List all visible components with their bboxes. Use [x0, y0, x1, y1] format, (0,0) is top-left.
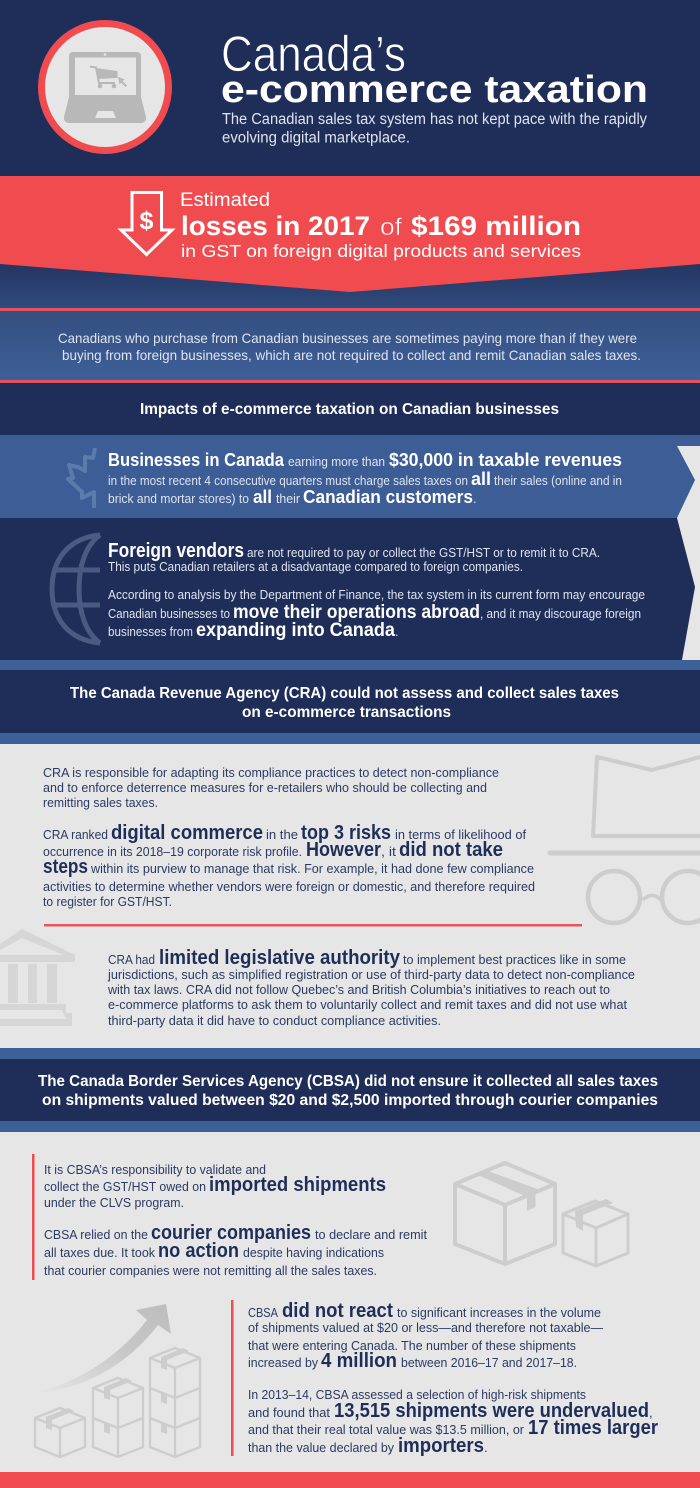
panel: CRA findings: [0, 744, 700, 1048]
CRA legislative authority text: third-party data it did have to conduct compliance activities.: [108, 1013, 441, 1028]
CBSA responsibility text: collect the GST/HST owed on: [44, 1179, 206, 1194]
losses headline: of: [380, 214, 402, 241]
CBSA undervalued shipments text: In 2013–14, CBSA assessed a selection of high-risk shipments: [248, 1387, 586, 1402]
foreign vendors text: move their operations abroad: [233, 601, 480, 623]
CRA digital commerce text: to register for GST/HST.: [43, 894, 172, 909]
CRA digital commerce text: occurrence in its 2018–19 corporate risk profile.: [43, 844, 302, 859]
panel: CBSA heading: [0, 1048, 700, 1132]
panel: consumer statement: buying from foreign businesses, which are not required to collect and remit Canadian sales taxes.: [62, 347, 641, 363]
foreign vendors text: [108, 540, 645, 641]
businesses text: $30,000 in taxable revenues: [389, 450, 622, 470]
foreign vendors text: expanding into Canada: [196, 619, 395, 641]
CBSA responsibility text: to declare and remit: [315, 1227, 427, 1242]
CBSA did not react text: of shipments valued at $20 or less—and therefore not taxable—: [248, 1320, 603, 1335]
CRA responsibility text: [43, 765, 499, 810]
CRA legislative authority text: limited legislative authority: [159, 947, 401, 969]
CBSA responsibility text: that courier companies were not remitting all the sales taxes.: [44, 1263, 377, 1278]
subtitle: [222, 111, 647, 146]
icon: maple leaf: [68, 448, 95, 508]
panel: CBSA heading: on shipments valued between $20 and $2,500 imported through courier companies: [42, 1092, 658, 1109]
CRA legislative authority text: e-commerce platforms to ask them to voluntarily collect and remit taxes and did not use what: [108, 997, 627, 1012]
CBSA responsibility text: courier companies: [151, 1222, 311, 1244]
icon: growth arrow: [35, 1304, 171, 1393]
CBSA undervalued shipments text: and found that: [248, 1405, 330, 1420]
businesses text: all: [253, 487, 272, 507]
foreign vendors text: are not required to pay or collect the GST/HST or to remit it to CRA.: [247, 545, 600, 560]
CRA digital commerce text: top 3 risks: [301, 822, 391, 844]
panel: CRA heading: on e-commerce transactions: [242, 704, 451, 721]
icon: two boxes: [455, 1163, 628, 1266]
losses headline: Estimated: [180, 190, 270, 211]
losses headline: [180, 190, 581, 261]
businesses text: .: [473, 491, 477, 506]
CRA digital commerce text: did not take: [399, 839, 503, 861]
icon: globe: [52, 535, 100, 643]
CBSA responsibility text: all taxes due. It took: [44, 1245, 155, 1260]
businesses text: earning more than: [288, 454, 385, 469]
panel: impacts heading: [0, 383, 700, 435]
panel: CRA heading: The Canada Revenue Agency (CRA) could not assess and collect sales taxes: [70, 685, 619, 702]
foreign vendors text: businesses from: [108, 624, 193, 639]
arrow: right chevron edge: [677, 446, 700, 660]
title: e-commerce taxation: [221, 69, 648, 111]
CRA legislative authority text: to implement best practices like in some: [403, 952, 626, 967]
CBSA did not react text: to significant increases in the volume: [397, 1305, 601, 1320]
foreign vendors text: .: [395, 624, 399, 639]
CRA digital commerce text: However: [306, 839, 381, 861]
CBSA did not react text: between 2016–17 and 2017–18.: [401, 1355, 577, 1370]
CBSA undervalued shipments text: [248, 1387, 658, 1457]
CBSA responsibility text: under the CLVS program.: [44, 1195, 184, 1210]
background panel: header: [0, 0, 700, 176]
foreign vendors text: This puts Canadian retailers at a disadvantage compared to foreign companies.: [108, 559, 523, 574]
losses headline: $169 million: [411, 211, 581, 241]
subtitle: The Canadian sales tax system has not kept pace with the rapidly: [222, 111, 647, 128]
panel: foreign vendors: [0, 518, 700, 660]
icon: laptop with shopping cart in circle: [42, 24, 168, 150]
icon: stacks of boxes: [35, 1348, 200, 1457]
foreign vendors text: According to analysis by the Department of Finance, the tax system in its current form may encourage: [108, 587, 645, 602]
panel: consumer statement: [0, 308, 700, 383]
CBSA responsibility text: It is CBSA’s responsibility to validate and: [44, 1162, 266, 1177]
panel: CBSA heading: The Canada Border Services Agency (CBSA) did not ensure it collected all sales taxes: [38, 1073, 658, 1090]
icon: down arrow with dollar sign: $: [140, 207, 154, 235]
CBSA did not react text: did not react: [282, 1300, 393, 1322]
CRA digital commerce text: within its purview to manage that risk. For example, it had done few compliance: [90, 861, 534, 876]
businesses text: Canadian customers: [303, 487, 473, 507]
CBSA undervalued shipments text: ,: [649, 1405, 653, 1420]
CBSA responsibility text: no action: [158, 1240, 239, 1262]
CRA digital commerce text: digital commerce: [111, 822, 263, 844]
CBSA undervalued shipments text: importers: [398, 1435, 484, 1457]
CBSA undervalued shipments text: 17 times larger: [528, 1417, 658, 1439]
losses headline: losses in 2017: [181, 211, 370, 241]
CBSA responsibility text: CBSA relied on the: [44, 1227, 148, 1242]
CRA responsibility text: CRA is responsible for adapting its compliance practices to detect non-compliance: [43, 765, 499, 780]
businesses text: [108, 450, 622, 507]
icon: government building: [0, 929, 75, 1026]
CRA legislative authority text: jurisdictions, such as simplified registration or use of third-party data to detect non-compliance: [107, 967, 635, 982]
panel: businesses in Canada: [0, 435, 700, 518]
CBSA undervalued shipments text: than the value declared by: [248, 1440, 394, 1455]
footer: red band: [0, 1472, 700, 1488]
subtitle: evolving digital marketplace.: [222, 130, 410, 146]
panel: consumer statement: Canadians who purchase from Canadian businesses are sometimes paying more than if they were: [58, 330, 637, 346]
CRA digital commerce text: [43, 822, 535, 909]
CRA legislative authority text: with tax laws. CRA did not follow Quebec’s and British Columbia’s initiatives to reach out to: [107, 982, 610, 997]
CBSA did not react text: that were entering Canada. The number of these shipments: [248, 1338, 576, 1353]
CBSA did not react text: CBSA: [248, 1305, 278, 1320]
CRA responsibility text: remitting sales taxes.: [43, 795, 158, 810]
background band under red banner: [0, 260, 700, 308]
panel: CRA heading: [0, 660, 700, 744]
businesses text: in the most recent 4 consecutive quarters must charge sales taxes on: [108, 473, 468, 488]
icon: down arrow with dollar sign: [121, 192, 172, 254]
businesses text: their: [276, 491, 301, 506]
losses headline: in GST on foreign digital products and services: [181, 241, 581, 261]
CBSA did not react text: increased by: [248, 1355, 318, 1370]
CBSA responsibility text: [44, 1162, 427, 1278]
CRA digital commerce text: in the: [266, 827, 298, 842]
CBSA undervalued shipments text: .: [484, 1440, 488, 1455]
CRA responsibility text: and to enforce deterrence measures for e-retailers who should be collecting and: [43, 780, 487, 795]
foreign vendors text: Foreign vendors: [108, 540, 244, 562]
CBSA did not react text: [248, 1300, 603, 1372]
panel: red losses banner: [0, 176, 700, 292]
CBSA did not react text: 4 million: [321, 1350, 397, 1372]
CRA digital commerce text: activities to determine whether vendors were foreign or domestic, and therefore required: [43, 879, 535, 894]
CRA digital commerce text: steps: [43, 856, 88, 878]
businesses text: Businesses in Canada: [108, 450, 285, 470]
businesses text: all: [471, 469, 491, 489]
CRA legislative authority text: CRA had: [108, 952, 155, 967]
panel: CBSA findings: [0, 1132, 700, 1472]
panel: impacts heading: Impacts of e-commerce taxation on Canadian businesses: [140, 401, 559, 418]
CBSA responsibility text: imported shipments: [209, 1174, 386, 1196]
CRA legislative authority text: [107, 947, 635, 1028]
CRA digital commerce text: CRA ranked: [43, 827, 108, 842]
foreign vendors text: Canadian businesses to: [108, 606, 230, 621]
title: Canada’s: [221, 26, 406, 82]
CBSA responsibility text: despite having indications: [243, 1245, 384, 1260]
CRA digital commerce text: in terms of likelihood of: [395, 827, 526, 842]
title: [221, 26, 648, 111]
CBSA undervalued shipments text: and that their real total value was $13.5 million, or: [248, 1422, 525, 1437]
businesses text: brick and mortar stores) to: [108, 491, 249, 506]
businesses text: their sales (online and in: [494, 473, 622, 488]
foreign vendors text: , and it may discourage foreign: [480, 606, 641, 621]
CBSA undervalued shipments text: 13,515 shipments were undervalued: [334, 1400, 649, 1422]
icon: hat and glasses: [550, 757, 700, 923]
CRA digital commerce text: , it: [381, 844, 396, 859]
